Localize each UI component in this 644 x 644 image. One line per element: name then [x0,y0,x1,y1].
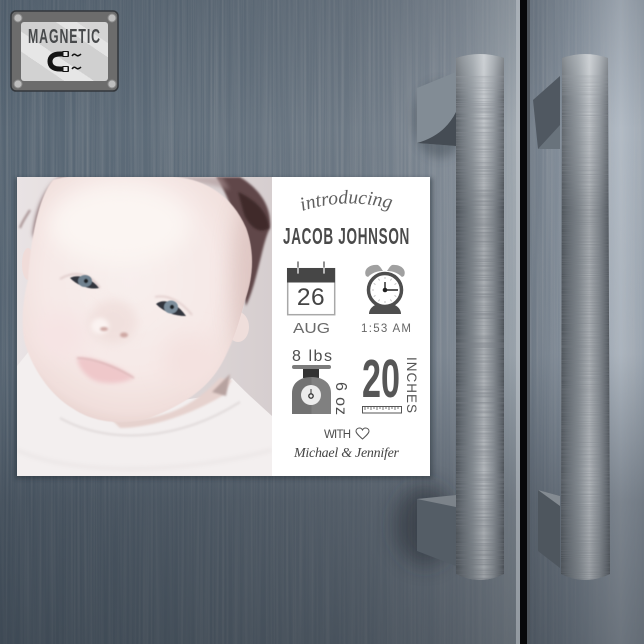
date month: AUG [293,320,330,337]
heading: name: JACOB JOHNSON [283,223,410,249]
baby ears [22,248,249,342]
icon: calendar [287,262,335,315]
icon: baby scale [292,365,331,414]
neck shadow [110,378,232,428]
icon: ruler [362,406,402,413]
right lower handle mount [538,490,560,568]
badge plate [21,22,108,81]
length unit: INCHES [404,357,419,413]
magnet card [17,177,430,476]
icon: alarm clock [365,265,405,314]
right eye [155,296,192,316]
baby shirt [17,350,272,476]
badge screws [14,14,116,88]
icon: heart [356,428,369,439]
weight ounces: 6 oz [332,382,349,415]
weight pounds: 8 lbs [292,348,332,365]
parents names: Michael & Jennifer [293,446,400,461]
baby mouth [77,358,134,383]
birth time: 1:53 AM [361,323,411,335]
left upper handle mount [414,72,466,158]
baby nose [92,302,134,341]
icon: magnet [50,52,81,72]
with label: WITH [324,429,351,441]
arc guide for heading [302,203,392,211]
left door handle [456,54,504,580]
left lower handle mount [395,485,456,566]
magnetic badge [11,11,118,91]
right door handle [561,54,610,580]
baby photo [17,174,272,476]
right upper handle mount [533,76,560,149]
magnet card shadow [15,178,433,479]
baby face [23,174,268,422]
date number: 26 [297,284,325,311]
length number: 20 [362,349,400,409]
badge label: MAGNETIC [28,26,101,48]
left eye [60,274,100,289]
baby hair [20,177,270,306]
heading: introducing: introducing [300,190,392,212]
